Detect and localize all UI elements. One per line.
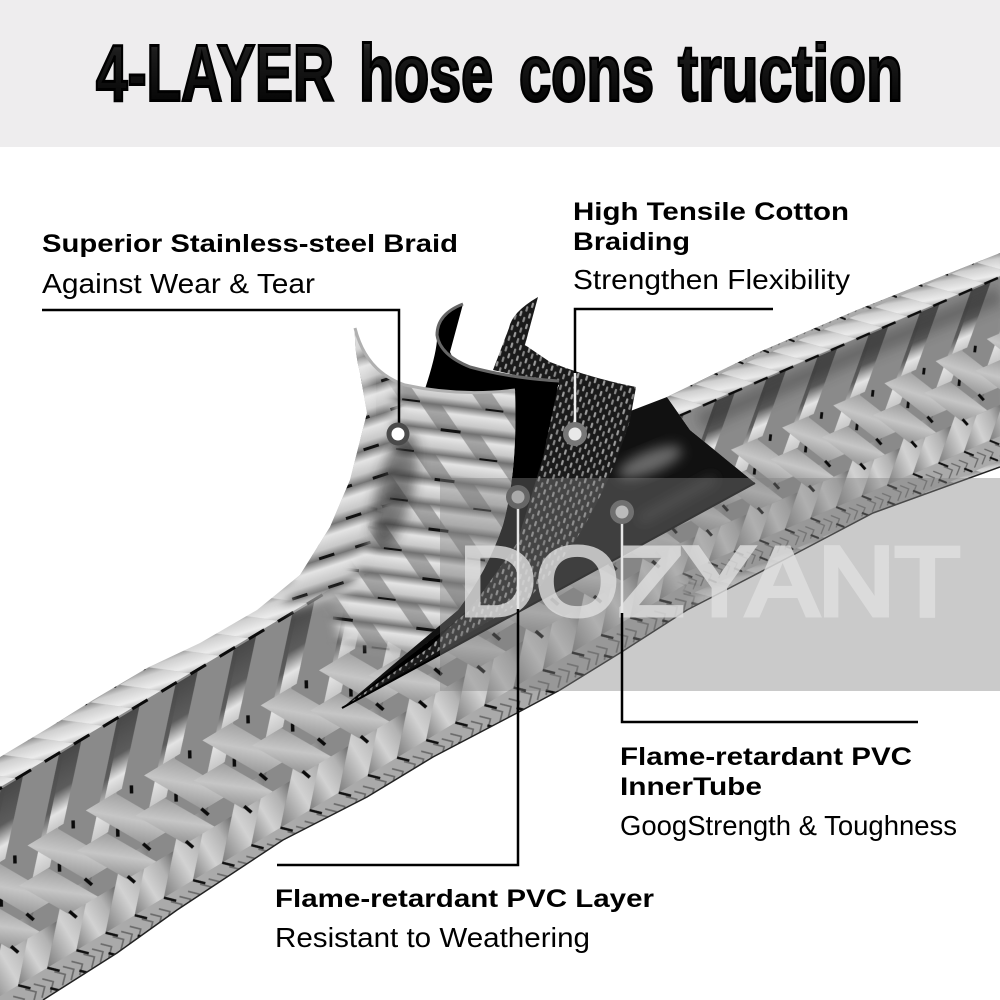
text block: inner tube: Flame-retardant PVC xyxy=(620,743,912,771)
text block: cotton braiding: High Tensile Cotton xyxy=(573,198,849,226)
inner tube layer xyxy=(342,397,758,708)
text block: inner tube: InnerTube xyxy=(620,773,762,801)
text block: PVC layer: Resistant to Weathering xyxy=(275,922,590,953)
title banner background xyxy=(0,0,1000,147)
flame-retardant PVC layer xyxy=(342,304,559,708)
text block: inner tube: GoogStrength & Toughness xyxy=(620,810,957,841)
text block: stainless-steel braid: Against Wear & Tear xyxy=(42,268,315,299)
text block: inner tube xyxy=(620,743,957,841)
hose illustration xyxy=(0,220,1000,1000)
marker: inner tube xyxy=(610,500,634,524)
stainless-steel braid, peeled flap and left hose xyxy=(0,328,516,860)
marker: cotton xyxy=(563,422,587,446)
title xyxy=(96,28,903,118)
text block: stainless-steel braid: Superior Stainless-steel Braid xyxy=(42,230,458,258)
title: hose xyxy=(359,28,493,118)
title: truction xyxy=(678,28,903,118)
text block: stainless-steel braid xyxy=(42,230,458,299)
title: cons xyxy=(519,28,654,118)
stainless-steel braid, right and lower hose xyxy=(0,220,1000,1000)
watermark text: DOZYANT xyxy=(459,527,960,636)
marker: braid xyxy=(386,422,410,446)
leader line: cotton braiding xyxy=(575,309,773,430)
text block: cotton braiding: Braiding xyxy=(573,228,690,256)
text block: PVC layer: Flame-retardant PVC Layer xyxy=(275,885,654,913)
text block: cotton braiding xyxy=(573,198,850,295)
text block: PVC layer xyxy=(275,885,654,953)
leader line: PVC layer xyxy=(277,505,518,865)
watermark band xyxy=(440,478,1000,691)
title: 4-LAYER xyxy=(96,28,334,118)
leader line: inner tube xyxy=(622,520,918,722)
text block: cotton braiding: Strengthen Flexibility xyxy=(573,264,850,295)
marker: PVC layer xyxy=(506,485,530,509)
cotton braiding layer xyxy=(342,297,636,708)
leader line: stainless-steel braid xyxy=(42,310,399,430)
